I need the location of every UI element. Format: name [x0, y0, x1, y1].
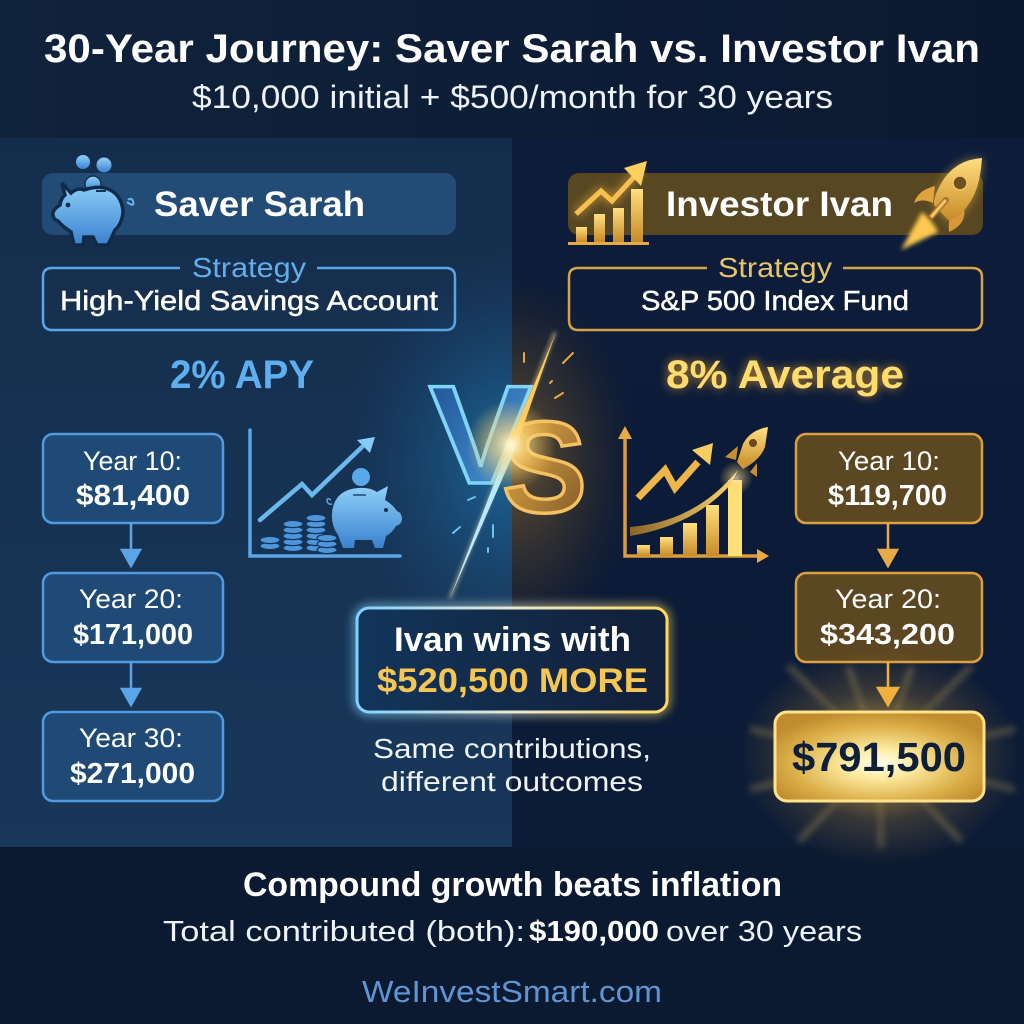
strategy name: High-Yield Savings Account — [60, 285, 438, 316]
header band — [0, 0, 1024, 138]
footer heading: Compound growth beats inflation — [243, 866, 782, 904]
icon: rising bar chart glow — [576, 170, 640, 214]
strategy box — [569, 268, 982, 330]
rate: 8% Average glow: 8% Average — [666, 353, 904, 397]
milestone: final value: $791,500 — [792, 734, 966, 780]
blue centre glow — [378, 288, 512, 606]
panel: Saver Sarah background — [0, 138, 512, 847]
VS emblem — [429, 332, 587, 598]
panel: Saver Sarah milestones — [43, 434, 223, 801]
callout glow — [357, 608, 667, 712]
name bar — [568, 173, 983, 235]
name: Investor Ivan — [666, 185, 893, 224]
milestone: year 10 — [796, 434, 982, 523]
chart: slow savings growth with piggy bank — [250, 430, 402, 556]
caption: Same contributions, — [373, 733, 651, 764]
milestone: year 20: $343,200 — [820, 619, 955, 651]
gold centre glow — [512, 300, 617, 606]
arrow: year 10 to 20 — [122, 523, 140, 566]
milestone: year 30: $271,000 — [70, 758, 195, 790]
caption: different outcomes — [381, 766, 643, 797]
strategy label: Strategy — [192, 252, 306, 283]
icon: piggy bank with coins — [53, 155, 133, 245]
milestone: year 20: Year 20: — [79, 584, 183, 614]
strategy name: S&P 500 Index Fund — [641, 285, 909, 316]
milestone: year 20: $171,000 — [73, 619, 193, 651]
strategy box — [43, 268, 455, 330]
arrow: year 10 to 20 — [879, 523, 897, 566]
icon: rising bar chart — [568, 161, 649, 245]
footer detail: $190,000 — [529, 916, 659, 948]
milestone: final value — [775, 712, 984, 801]
milestone: year 10: $119,700 — [828, 480, 947, 512]
burst behind final value — [740, 648, 1020, 864]
rate: 2% APY: 2% APY — [170, 353, 314, 397]
panel: Investor Ivan background — [512, 138, 1024, 847]
milestone: year 30 — [43, 712, 223, 801]
lightning blue half — [450, 450, 515, 598]
footer detail — [163, 916, 862, 948]
callout: Ivan wins — [357, 608, 667, 712]
milestone: year 20 — [43, 573, 223, 662]
panel: Investor Ivan header — [568, 158, 983, 250]
sparks — [453, 353, 573, 552]
icon: rocket glow — [934, 158, 982, 220]
letter V: V — [429, 356, 532, 513]
milestone: year 30: Year 30: — [79, 723, 183, 753]
chart: compounding growth with rocket — [618, 426, 769, 563]
milestone: year 20 — [796, 573, 982, 662]
milestone: year 10 — [43, 434, 223, 523]
subtitle: $10,000 initial + $500/month for 30 years — [192, 79, 833, 115]
milestone: year 10: Year 10: — [838, 446, 940, 476]
milestone: year 10: $81,400 — [76, 480, 190, 512]
lightning gold half — [507, 332, 556, 450]
callout line one: Ivan wins with — [394, 621, 631, 659]
callout amount: $520,500 MORE — [377, 662, 648, 700]
milestone: year 10: Year 10: — [83, 446, 182, 476]
panel: Investor Ivan milestones — [740, 434, 1020, 864]
milestone: year 20: Year 20: — [835, 584, 941, 614]
brand: WeInvestSmart.com — [362, 974, 662, 1009]
footer detail: over 30 years — [666, 916, 862, 948]
panel: Saver Sarah header — [42, 155, 456, 245]
footer detail: Total contributed (both): — [163, 916, 525, 948]
arrow: year 20 to final — [878, 662, 898, 705]
callout box — [357, 608, 667, 712]
rate: 8% Average: 8% Average — [666, 353, 904, 397]
icon: rocket — [901, 158, 982, 250]
caption — [373, 733, 651, 797]
strategy label: Strategy — [718, 252, 832, 283]
footer band — [0, 847, 1024, 1024]
centre flash — [466, 400, 556, 490]
panel: Investor Ivan strategy — [569, 252, 982, 330]
letter S: S — [502, 394, 587, 540]
lightning glow — [450, 332, 555, 598]
name bar — [42, 173, 456, 235]
arrow: year 20 to 30 — [122, 662, 140, 705]
name: Saver Sarah — [154, 185, 365, 224]
panel: Saver Sarah strategy — [43, 252, 455, 330]
title: 30-Year Journey: Saver Sarah vs. Investor Ivan — [44, 27, 980, 71]
